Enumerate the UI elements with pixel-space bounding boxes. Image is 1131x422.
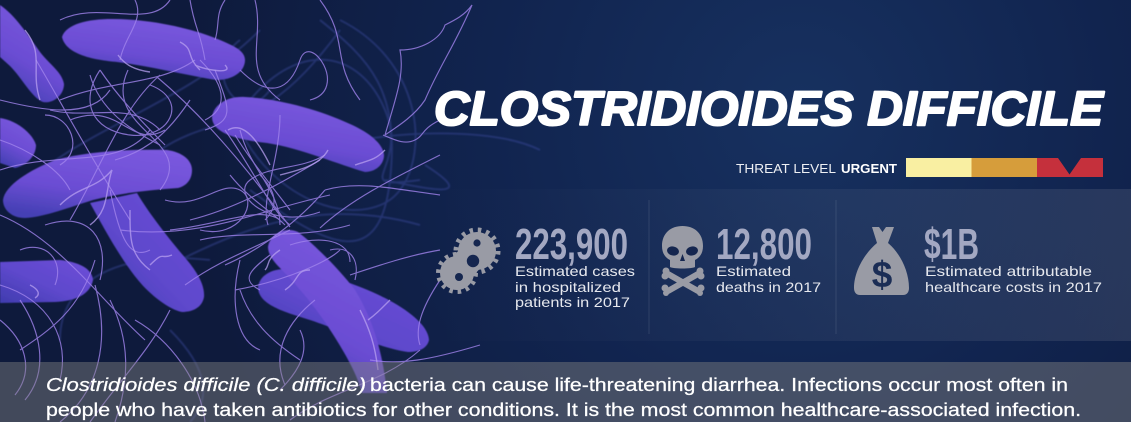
label: deaths: deaths in 2017 (716, 279, 821, 295)
icon: money bag (854, 227, 909, 295)
bacterium: centre right (212, 97, 384, 172)
threat level label: URGENT (841, 161, 897, 176)
label: deaths (716, 263, 821, 295)
number: cases: 223,900 (515, 220, 628, 269)
label: deaths: Estimated (716, 263, 791, 279)
description text: people who have taken antibiotics for other conditions. It is the most common healthcare-associated infection. (46, 400, 1081, 420)
filaments over bacteria (25, 30, 390, 370)
stat: deaths (662, 220, 821, 296)
bacterium: centre left (3, 150, 192, 218)
bacterium: bottom right front (268, 230, 387, 393)
bacterium: bottom right back (258, 269, 429, 352)
bacterium: lower diagonal (90, 193, 204, 312)
description text: bacteria can cause life-threatening diarrhea. Infections occur most often in (370, 375, 1068, 395)
threat level bar (906, 158, 1103, 177)
label: cases (515, 263, 635, 310)
icon: bacterium (438, 230, 498, 292)
label: costs: healthcare costs in 2017 (925, 279, 1102, 295)
label: cases: patients in 2017 (515, 294, 630, 310)
bacteria cluster (0, 5, 429, 393)
description text (46, 375, 1081, 420)
bacterium: top left (0, 5, 64, 102)
background filaments (10, 20, 540, 422)
number: deaths: 12,800 (716, 220, 812, 269)
label: costs (925, 263, 1102, 295)
icon: money bag: $ (872, 254, 893, 295)
dividers (649, 200, 836, 334)
bacterium: top centre (62, 19, 245, 80)
filaments (0, 0, 480, 422)
threat level label: THREAT LEVEL (736, 161, 836, 176)
stats panel (432, 189, 1131, 341)
title: CLOSTRIDIOIDES DIFFICILE (434, 83, 1105, 136)
number: costs: $1B (924, 220, 979, 269)
label: cases: in hospitalized (515, 279, 621, 295)
bacterium: left edge (0, 118, 36, 168)
label: costs: Estimated attributable (925, 263, 1092, 279)
threat level label (736, 161, 897, 176)
icon: skull and crossbones (662, 226, 704, 296)
stat: cases (438, 220, 635, 310)
description band (0, 362, 1131, 422)
label: cases: Estimated cases (515, 263, 635, 279)
bacterium: bottom left (0, 260, 93, 303)
description text: Clostridioides difficile (C. difficile) (46, 375, 366, 395)
stat: costs (854, 220, 1102, 295)
